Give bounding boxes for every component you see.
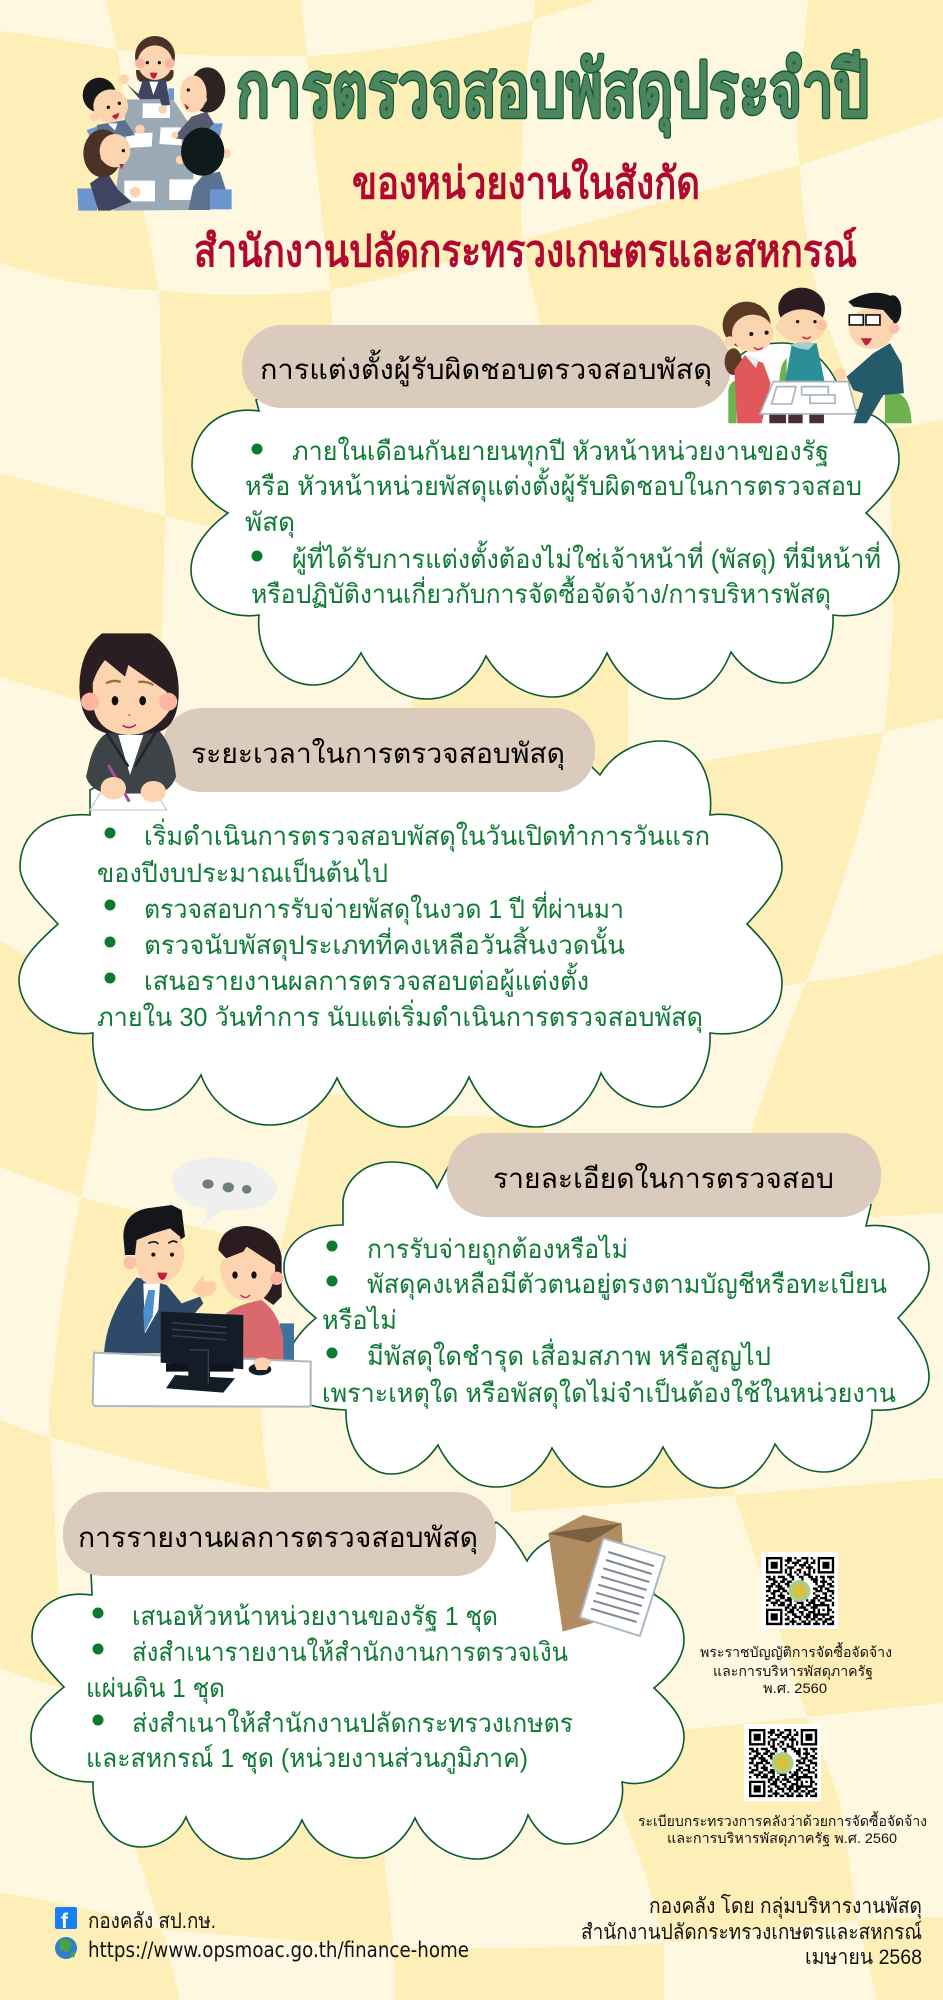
- illustration: three people at a table: [723, 288, 912, 423]
- cloud panel 1: [191, 343, 899, 699]
- QR code 1: [761, 1552, 838, 1629]
- illustration: meeting around a table: [77, 36, 232, 211]
- caption for QR code 1: พ.ศ. 2560: [763, 1680, 827, 1696]
- body text panel 1: ภายในเดือนกันยายนทุกปี หัวหน้าหน่วยงานของรัฐ: [292, 436, 829, 467]
- body text panel 4: เสนอหัวหน้าหน่วยงานของรัฐ 1 ชุด: [132, 1601, 498, 1632]
- body text panel 4: และสหกรณ์ 1 ชุด (หน่วยงานส่วนภูมิภาค): [86, 1743, 528, 1774]
- cloud panel 3: [283, 1162, 929, 1488]
- caption for QR code 1: และการบริหารพัสดุภาครัฐ: [713, 1663, 873, 1680]
- heading pill 3: [447, 1133, 881, 1217]
- heading pill 4: การรายงานผลการตรวจสอบพัสดุ: [78, 1522, 478, 1555]
- illustration: envelope and document: [548, 1515, 665, 1636]
- heading pill 3: รายละเอียดในการตรวจสอบ: [493, 1162, 834, 1194]
- body text panel 3: การรับจ่ายถูกต้องหรือไม่: [367, 1234, 628, 1265]
- footer: facebook name: กองคลัง สป.กษ.: [88, 1910, 216, 1933]
- body text panel 3: หรือไม่: [322, 1305, 397, 1335]
- body text panel 3: [322, 1234, 896, 1409]
- caption for QR code 2: ระเบียบกระทรวงการคลังว่าด้วยการจัดซื้อจัดจ้าง: [638, 1811, 927, 1829]
- body text panel 4: [86, 1601, 573, 1774]
- cloud panel 2: [19, 741, 782, 1127]
- body text panel 3: พัสดุคงเหลือมีตัวตนอยู่ตรงตามบัญชีหรือทะเบียน: [367, 1269, 887, 1300]
- body text panel 2: [97, 818, 710, 1033]
- body text panel 1: หรือ หัวหน้าหน่วยพัสดุแต่งตั้งผู้รับผิดชอบในการตรวจสอบ: [245, 467, 862, 502]
- footer: credits: เมษายน 2568: [805, 1946, 922, 1969]
- body text panel 2: ของปีงบประมาณเป็นต้นไป: [97, 857, 388, 888]
- subtitle line 1: ของหน่วยงานในสังกัด: [352, 157, 700, 208]
- heading pill 1: การแต่งตั้งผู้รับผิดชอบตรวจสอบพัสดุ: [260, 349, 712, 387]
- heading pill 4: [63, 1492, 496, 1576]
- body text panel 1: ผู้ที่ได้รับการแต่งตั้งต้องไม่ใช่เจ้าหน้าที่ (พัสดุ) ที่มีหน้าที่: [292, 540, 881, 575]
- caption for QR code 2: [638, 1811, 927, 1847]
- body text panel 2: เสนอรายงานผลการตรวจสอบต่อผู้แต่งตั้ง: [144, 962, 589, 997]
- body text panel 2: เริ่มดำเนินการตรวจสอบพัสดุในวันเปิดทำการวันแรก: [144, 818, 710, 852]
- footer: credits: [581, 1894, 922, 1969]
- illustration: colleagues at a computer: [93, 1157, 311, 1407]
- body text panel 2: ตรวจนับพัสดุประเภทที่คงเหลือวันสิ้นงวดนั้น: [144, 926, 625, 961]
- icon: facebook: [55, 1907, 77, 1933]
- heading pill 2: ระยะเวลาในการตรวจสอบพัสดุ: [191, 737, 565, 771]
- footer: website url: https://www.opsmoac.go.th/finance-home: [88, 1938, 469, 1962]
- icon: facebook: f: [61, 1910, 69, 1933]
- heading pill 1: [242, 325, 731, 408]
- body text panel 1: พัสดุ: [245, 507, 295, 538]
- body text panel 4: ส่งสำเนาให้สำนักงานปลัดกระทรวงเกษตร: [132, 1708, 573, 1738]
- caption for QR code 1: พระราชบัญญัติการจัดซื้อจัดจ้าง: [700, 1642, 892, 1660]
- caption for QR code 1: [700, 1642, 892, 1696]
- body text panel 2: ตรวจสอบการรับจ่ายพัสดุในงวด 1 ปี ที่ผ่านมา: [144, 891, 624, 925]
- body text panel 1: หรือปฏิบัติงานเกี่ยวกับการจัดซื้อจัดจ้าง/การบริหารพัสดุ: [251, 575, 831, 610]
- body text panel 2: ภายใน 30 วันทำการ นับแต่เริ่มดำเนินการตรวจสอบพัสดุ: [97, 999, 703, 1033]
- icon: globe: [55, 1937, 77, 1959]
- illustration: woman writing: [79, 633, 179, 810]
- body text panel 4: ส่งสำเนารายงานให้สำนักงานการตรวจเงิน: [132, 1637, 568, 1667]
- heading pill 2: [162, 708, 595, 792]
- body text panel 3: มีพัสดุใดชำรุด เสื่อมสภาพ หรือสูญไป: [367, 1338, 771, 1372]
- caption for QR code 2: และการบริหารพัสดุภาครัฐ พ.ศ. 2560: [667, 1830, 897, 1847]
- cloud panel 4: [31, 1522, 684, 1859]
- QR code 2: [744, 1724, 821, 1801]
- footer: credits: กองคลัง โดย กลุ่มบริหารงานพัสดุ: [649, 1894, 922, 1919]
- body text panel 4: แผ่นดิน 1 ชุด: [86, 1673, 225, 1704]
- body text panel 3: เพราะเหตุใด หรือพัสดุใดไม่จำเป็นต้องใช้ในหน่วยงาน: [322, 1377, 896, 1409]
- body text panel 1: [245, 436, 881, 610]
